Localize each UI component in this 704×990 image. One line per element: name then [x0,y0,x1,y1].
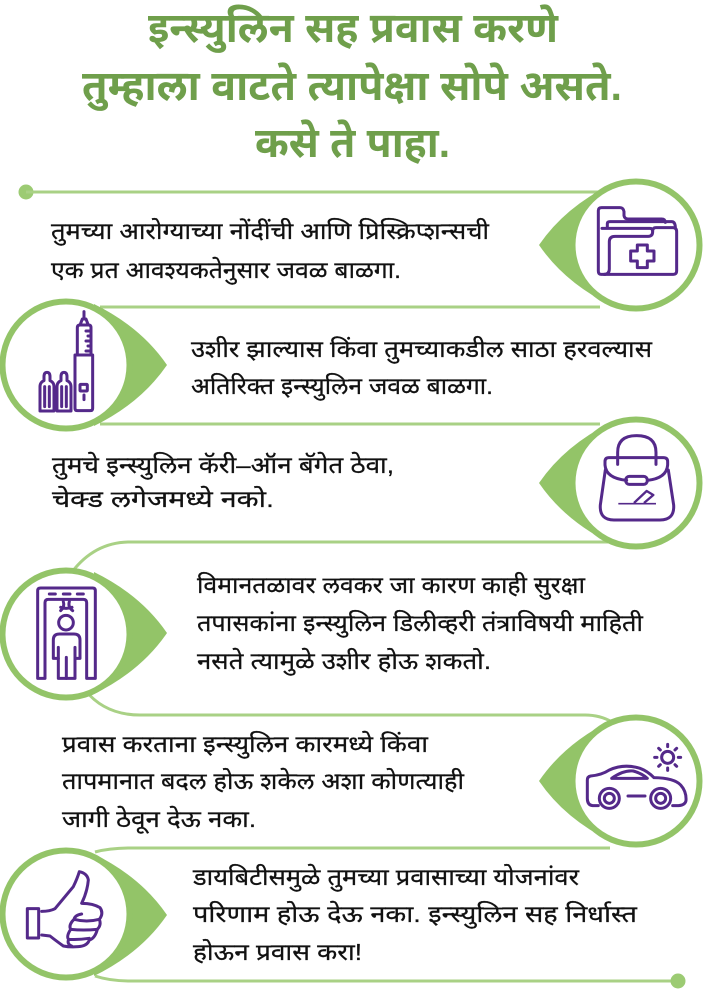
text block: जागी ठेवून देऊ नका. [62,806,256,834]
badge [539,714,702,848]
icon: medical folder [598,208,677,274]
title: इन्स्युलिन सह प्रवास करणे [148,4,559,53]
text block: तपासकांना इन्स्युलिन डिलीव्हरी तंत्राविषयी माहिती [197,610,644,638]
text block: डायबिटीसमुळे तुमच्या प्रवासाच्या योजनांवर [192,864,580,892]
icon: car and sun [587,744,686,808]
text block: तापमानात बदल होऊ शकेल अशा कोणत्याही [62,768,465,794]
text block: उशीर झाल्यास किंवा तुमच्याकडील साठा हरवल्यास [191,336,652,364]
panel: airport security [0,568,644,700]
connector path [18,184,686,988]
badge [0,848,167,980]
text block: नसते त्यामुळे उशीर होऊ शकतो. [197,648,491,676]
badge [539,416,702,550]
icon: insulin pen and vials [40,312,93,411]
panel: car heat [62,714,702,848]
badge [539,178,702,312]
text block: तुमचे इन्स्युलिन कॅरी–ऑन बॅगेत ठेवा, [52,452,394,480]
text block: विमानतळावर लवकर जा कारण काही सुरक्षा [197,572,586,600]
icon: security scanner [38,588,95,678]
text block [192,864,638,965]
badge [0,568,167,700]
panel: travel confidently [0,848,638,980]
text block: तुमच्या आरोग्याच्या नोंदींची आणि प्रिस्क्रिप्शन्सची [51,218,490,246]
text block: होऊन प्रवास करा! [193,939,362,965]
panel: health records [51,178,702,312]
text block: प्रवास करताना इन्स्युलिन कारमध्ये किंवा [62,731,429,759]
text block [52,452,394,512]
text block: अतिरिक्त इन्स्युलिन जवळ बाळगा. [191,373,493,401]
panel: extra insulin [0,298,652,432]
icon: handbag [600,436,674,520]
panel: carry-on bag [52,416,702,550]
text block: परिणाम होऊ देऊ नका. इन्स्युलिन सह निर्धास्त [193,901,638,929]
title: तुम्हाला वाटते त्यापेक्षा सोपे असते. [82,62,622,111]
title [82,4,622,166]
text block: एक प्रत आवश्यकतेनुसार जवळ बाळगा. [51,257,401,285]
title: कसे ते पाहा. [255,119,450,166]
text block: चेक्ड लगेजमध्ये नको. [52,486,274,512]
icon: thumbs up [27,872,102,947]
badge [0,298,167,432]
text block [51,218,490,285]
text block [62,731,465,834]
text block [197,572,644,676]
text block [191,336,652,401]
